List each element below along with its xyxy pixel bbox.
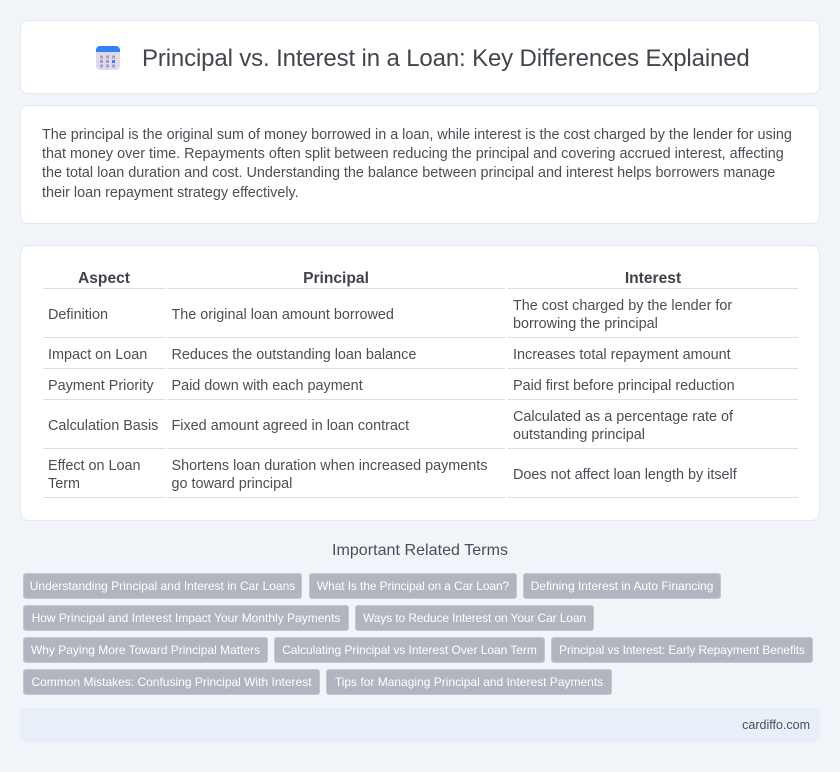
related term tags: Why Paying More Toward Principal Matters [31, 643, 260, 657]
related term tags [23, 573, 813, 695]
title: Principal vs. Interest in a Loan: Key Differences Explained [142, 45, 750, 72]
row: definition [48, 298, 732, 332]
row: effect on loan term: go toward principal [172, 476, 292, 492]
related term tags: Defining Interest in Auto Financing [531, 579, 713, 593]
table header: Interest [625, 270, 681, 287]
row: impact on loan [48, 347, 731, 363]
footer site name: cardiffo.com [742, 718, 810, 732]
row: definition: The cost charged by the lender for [513, 298, 732, 314]
intro text: The principal is the original sum of money borrowed in a loan, while interest is the cost charged by the lender for using [42, 127, 792, 143]
row: calculation basis [48, 409, 734, 443]
row: effect on loan term [48, 458, 737, 492]
row: impact on loan: Increases total repayment amount [513, 347, 731, 363]
row: calculation basis: outstanding principal [513, 427, 645, 443]
related term tags: How Principal and Interest Impact Your Monthly Payments [32, 611, 340, 625]
row: calculation basis: Fixed amount agreed in loan contract [172, 418, 409, 434]
row: definition: borrowing the principal [513, 316, 658, 332]
panel: introduction [20, 105, 820, 224]
related term tags: Common Mistakes: Confusing Principal With Interest [31, 675, 312, 689]
table header: Aspect [78, 270, 130, 287]
related term tags: Calculating Principal vs Interest Over Loan Term [282, 643, 537, 657]
related term tags: Ways to Reduce Interest on Your Car Loan [363, 611, 586, 625]
row: impact on loan: Reduces the outstanding loan balance [172, 347, 416, 363]
table header: Principal [303, 270, 369, 287]
intro text: their loan repayment strategy effectively. [42, 185, 299, 201]
row: payment priority: Paid down with each payment [172, 378, 363, 394]
intro text: the total loan duration and cost. Understanding the balance between principal and interest helps borrowers manage [42, 165, 775, 181]
row: effect on loan term: Effect on Loan [48, 458, 141, 474]
intro text: that money over time. Repayments often split between reducing the principal and covering accrued interest, affecting [42, 146, 784, 162]
row: payment priority: Paid first before principal reduction [513, 378, 735, 394]
row: calculation basis: Calculated as a percentage rate of [513, 409, 733, 425]
row: payment priority: Payment Priority [48, 378, 154, 394]
related term tags: What Is the Principal on a Car Loan? [317, 579, 509, 593]
row: definition: The original loan amount borrowed [172, 307, 394, 323]
related term tags: Principal vs Interest: Early Repayment Benefits [559, 643, 805, 657]
related term tags: Tips for Managing Principal and Interest Payments [335, 675, 603, 689]
related term tags: Understanding Principal and Interest in Car Loans [30, 579, 295, 593]
heading: important related terms: Important Related Terms [332, 542, 508, 559]
row: definition: Definition [48, 307, 108, 323]
row: calculation basis: Calculation Basis [48, 418, 158, 434]
row: payment priority [48, 378, 735, 394]
row: effect on loan term: Does not affect loan length by itself [513, 467, 737, 483]
row: effect on loan term: Term [48, 476, 80, 492]
intro text [42, 127, 792, 201]
row: effect on loan term: Shortens loan duration when increased payments [172, 458, 488, 474]
panel: comparison table [20, 245, 820, 521]
footer [20, 708, 820, 742]
row: impact on loan: Impact on Loan [48, 347, 147, 363]
icon: calendar [96, 46, 120, 70]
header panel [20, 20, 820, 94]
table header [78, 270, 681, 287]
